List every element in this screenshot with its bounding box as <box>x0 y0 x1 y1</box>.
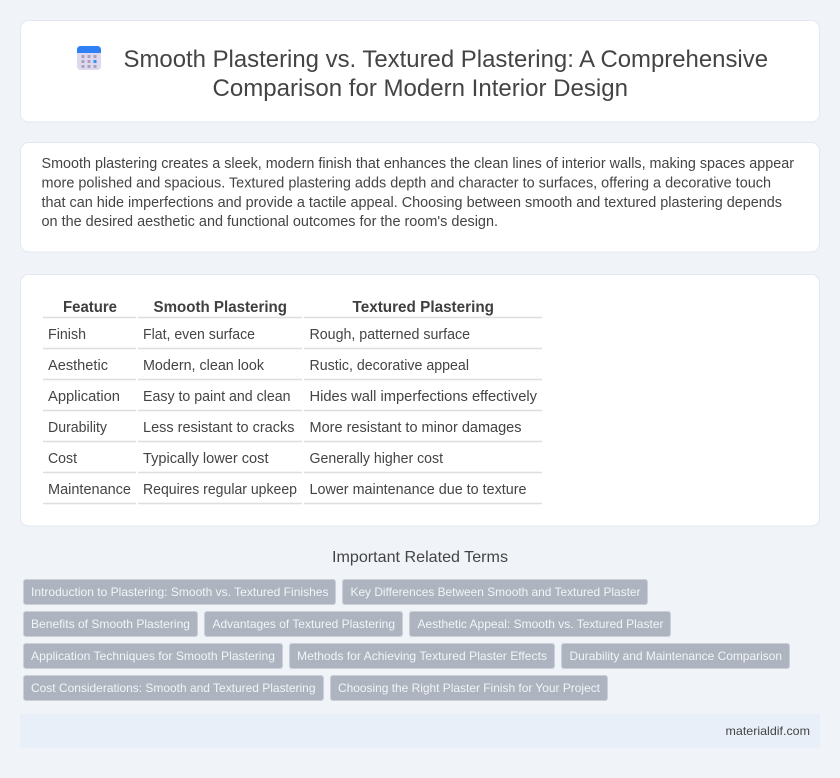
related terms heading: Important Related Terms <box>332 549 508 566</box>
panel: header <box>20 20 820 122</box>
table header row: Feature <box>63 299 117 316</box>
tag <box>204 612 402 636</box>
row: finish <box>48 327 470 343</box>
tag <box>24 612 198 636</box>
tag <box>342 580 648 604</box>
row: application: Easy to paint and clean <box>143 389 290 405</box>
row: aesthetic: Aesthetic <box>48 358 108 374</box>
tag: Application Techniques for Smooth Plastering <box>31 649 275 663</box>
intro paragraph: on the desired aesthetic and functional outcomes for the room's design. <box>42 214 498 230</box>
tag <box>562 644 790 668</box>
title <box>124 46 768 102</box>
row: application <box>48 389 538 405</box>
tag: Aesthetic Appeal: Smooth vs. Textured Plaster <box>418 617 664 631</box>
intro paragraph <box>42 156 794 230</box>
panel: comparison table <box>20 274 820 526</box>
row: finish: Flat, even surface <box>143 327 255 343</box>
tag <box>410 612 670 636</box>
footer <box>20 714 820 748</box>
row: cost: Generally higher cost <box>310 451 443 467</box>
title: Comparison for Modern Interior Design <box>212 75 628 102</box>
tag: Introduction to Plastering: Smooth vs. Textured Finishes <box>31 585 328 599</box>
row: aesthetic <box>48 358 469 374</box>
row: finish: Rough, patterned surface <box>310 327 470 343</box>
tag: Cost Considerations: Smooth and Textured Plastering <box>31 681 316 695</box>
row: finish: Finish <box>48 327 86 343</box>
row: maintenance: Requires regular upkeep <box>143 482 297 498</box>
title: Smooth Plastering vs. Textured Plastering: A Comprehensive <box>124 46 768 73</box>
panel: introduction <box>20 142 820 252</box>
intro paragraph: that can hide imperfections and provide a tactile appeal. Choosing between smooth and textured plastering depends <box>42 195 782 211</box>
row: cost: Typically lower cost <box>143 451 268 467</box>
footer: materialdif.com <box>726 724 810 738</box>
row: aesthetic: Rustic, decorative appeal <box>310 358 469 374</box>
tag <box>24 644 282 668</box>
tag <box>290 644 554 668</box>
intro paragraph: more polished and spacious. Textured plastering adds depth and character to surfaces, offering a decorative touch <box>42 175 771 191</box>
row: application: Hides wall imperfections effectively <box>310 389 538 405</box>
tag: Durability and Maintenance Comparison <box>570 649 782 663</box>
tag <box>330 676 608 700</box>
related terms tags <box>24 580 790 700</box>
tag: Advantages of Textured Plastering <box>212 617 395 631</box>
tag: Methods for Achieving Textured Plaster Effects <box>297 649 547 663</box>
table header row: Smooth Plastering <box>154 299 287 316</box>
row: durability: Durability <box>48 420 108 436</box>
table header row <box>63 299 494 316</box>
row: maintenance <box>48 482 526 498</box>
tag <box>24 676 324 700</box>
intro paragraph: Smooth plastering creates a sleek, modern finish that enhances the clean lines of interior walls, making spaces appear <box>42 156 794 172</box>
row: durability: Less resistant to cracks <box>143 420 294 436</box>
row: application: Application <box>48 389 120 405</box>
tag: Benefits of Smooth Plastering <box>31 617 190 631</box>
tag <box>24 580 336 604</box>
row: cost: Cost <box>48 451 77 467</box>
tag: Choosing the Right Plaster Finish for Your Project <box>338 681 601 695</box>
table header row: Textured Plastering <box>352 299 494 316</box>
row: cost <box>48 451 443 467</box>
row: durability <box>48 420 522 436</box>
row: aesthetic: Modern, clean look <box>143 358 265 374</box>
row: durability: More resistant to minor damages <box>310 420 522 436</box>
row: maintenance: Maintenance <box>48 482 131 498</box>
icon: calendar <box>77 46 101 70</box>
row: maintenance: Lower maintenance due to texture <box>310 482 526 498</box>
tag: Key Differences Between Smooth and Textured Plaster <box>350 585 641 599</box>
